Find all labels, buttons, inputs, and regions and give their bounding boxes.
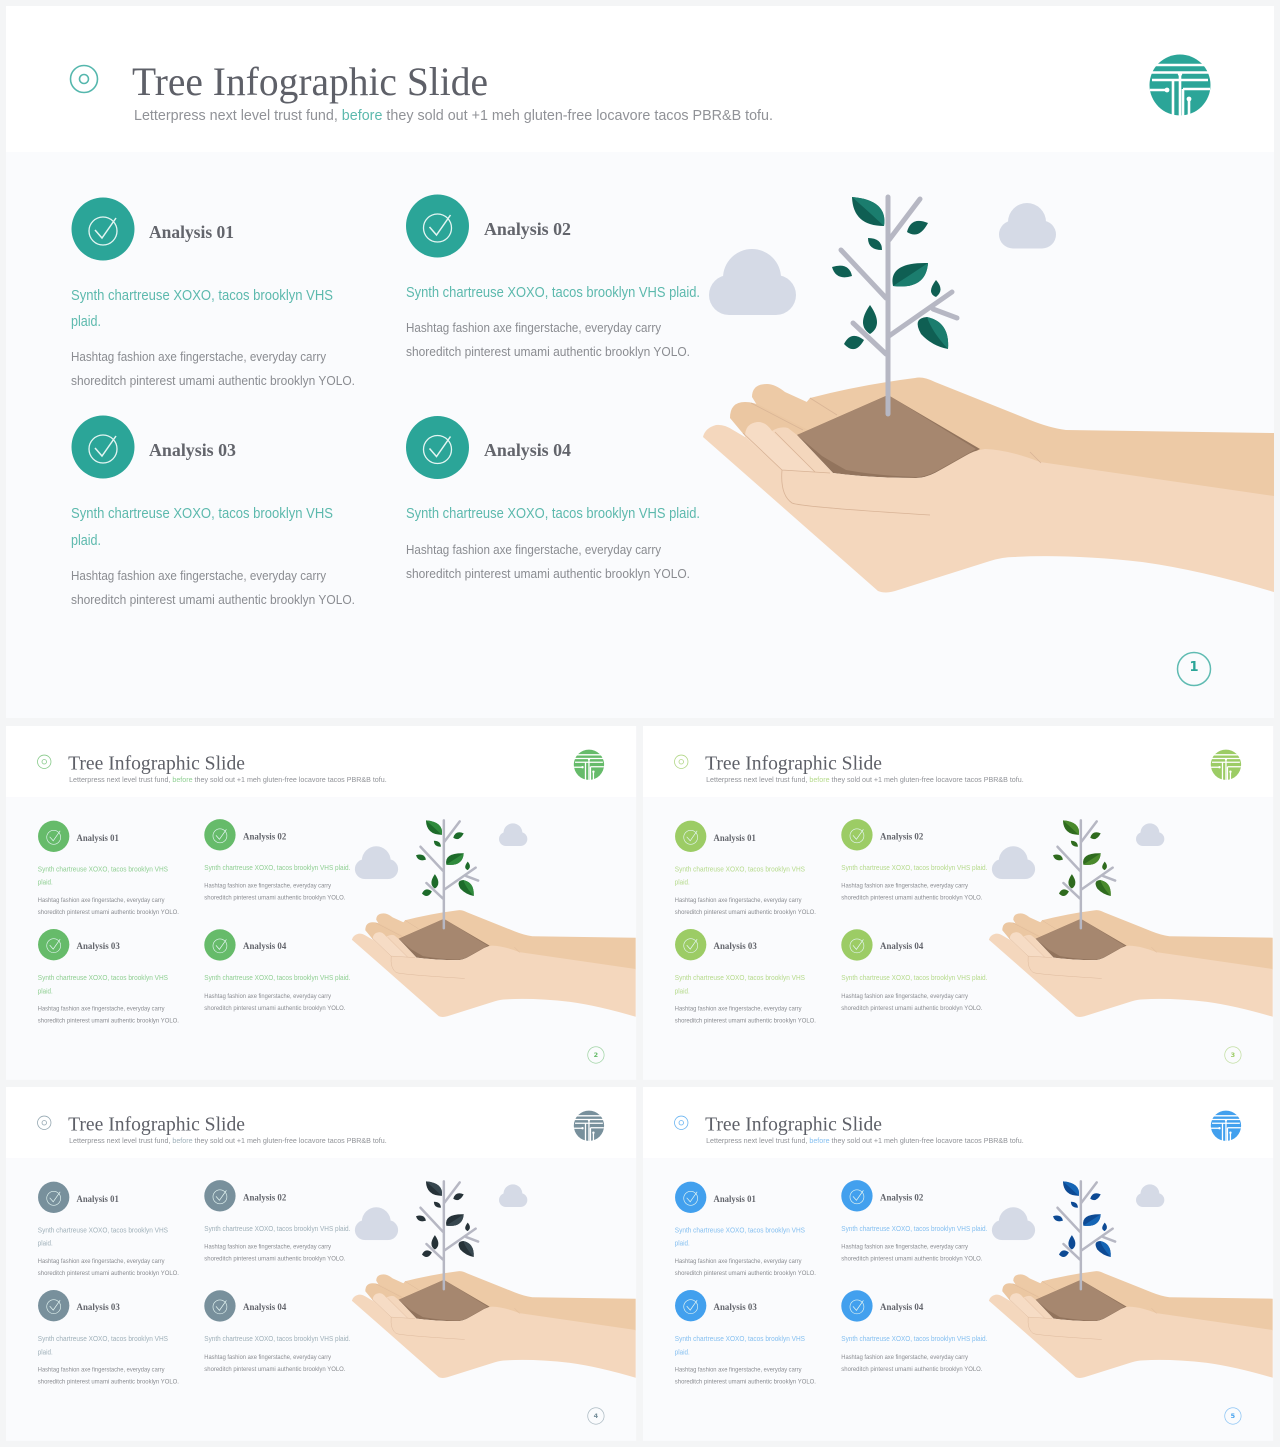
block: Analysis 03: plaid. [675,1347,690,1356]
icon: target [70,66,98,92]
page number [1225,1408,1241,1424]
cloud: large [709,249,796,315]
illustration: hands holding soil [703,378,1274,592]
block: Analysis 04 [841,929,987,1012]
block: Analysis 02: Analysis 02 [880,1192,924,1202]
title: Tree Infographic Slide [132,59,488,104]
block: Analysis 02: Hashtag fashion axe fingerstache, everyday carry [204,883,332,890]
block: Analysis 02: Analysis 02 [243,1192,287,1202]
block: Analysis 04: Synth chartreuse XOXO, tacos brooklyn VHS plaid. [841,1334,987,1343]
cloud: large [355,1207,398,1240]
page number: 2 [594,1051,598,1059]
block: Analysis 02 [841,1180,987,1262]
subtitle: Letterpress next level trust fund, before they sold out +1 meh gluten-free locavore tacos PBR&B tofu. [706,775,1024,784]
block: Analysis 01: Hashtag fashion axe fingerstache, everyday carry [675,1258,802,1265]
slide background [6,726,636,1080]
block: Analysis 03: Hashtag fashion axe fingerstache, everyday carry [675,1367,802,1374]
subtitle: Letterpress next level trust fund, before they sold out +1 meh gluten-free locavore tacos PBR&B tofu. [134,108,773,124]
block: Analysis 01: shoreditch pinterest umami authentic brooklyn YOLO. [71,374,355,388]
block: Analysis 01: Analysis 01 [77,1194,119,1204]
block: Analysis 03 [675,929,816,1025]
block: Analysis 03: Analysis 03 [714,941,757,951]
slide background [643,726,1273,1080]
block: Analysis 03 [71,416,355,607]
block: Analysis 02: shoreditch pinterest umami authentic brooklyn YOLO. [204,894,346,901]
title: Tree Infographic Slide [68,1114,245,1136]
block: Analysis 01: Synth chartreuse XOXO, tacos brooklyn VHS [675,865,805,874]
block: Analysis 02: Synth chartreuse XOXO, tacos brooklyn VHS plaid. [841,863,987,872]
icon: check [72,198,134,260]
block: Analysis 01: plaid. [675,1239,690,1248]
block: Analysis 03: shoreditch pinterest umami authentic brooklyn YOLO. [38,1018,179,1025]
block: Analysis 01: Hashtag fashion axe fingerstache, everyday carry [38,897,165,904]
body text: Hashtag fashion axe fingerstache, everyday carry [71,350,327,364]
block: Analysis 04: shoreditch pinterest umami authentic brooklyn YOLO. [841,1005,983,1012]
illustration: sapling [832,197,957,414]
panel: slide 2 (green) [6,726,636,1080]
block: Analysis 03: Synth chartreuse XOXO, tacos brooklyn VHS [675,973,805,982]
block: Analysis 04 [406,416,700,581]
cloud: large [992,1207,1035,1240]
page number: 1 [1189,660,1199,675]
block: Analysis 02: Synth chartreuse XOXO, tacos brooklyn VHS plaid. [204,863,350,872]
illustration: sapling [1053,1181,1115,1289]
block: Analysis 03: shoreditch pinterest umami authentic brooklyn YOLO. [38,1379,179,1386]
block: Analysis 03 [675,1290,816,1386]
accent text: Synth chartreuse XOXO, tacos brooklyn VHS [71,506,333,522]
illustration: hands holding soil [989,1271,1273,1378]
cloud: small [1136,823,1164,846]
block: Analysis 04: shoreditch pinterest umami authentic brooklyn YOLO. [204,1366,346,1373]
block: Analysis 01: Hashtag fashion axe fingerstache, everyday carry [38,1258,165,1265]
title: Tree Infographic Slide [705,1114,882,1136]
illustration: hands holding soil [989,910,1273,1017]
icon: target [38,755,51,768]
accent text: Synth chartreuse XOXO, tacos brooklyn VHS plaid. [406,285,700,301]
block: Analysis 04: Synth chartreuse XOXO, tacos brooklyn VHS plaid. [204,973,350,982]
block: Analysis 01: plaid. [71,314,101,330]
block: Analysis 01: Analysis 01 [714,1194,756,1204]
block: Analysis 02: shoreditch pinterest umami authentic brooklyn YOLO. [841,894,983,901]
block: Analysis 03: Synth chartreuse XOXO, tacos brooklyn VHS [38,1334,168,1343]
block: Analysis 03 [38,929,179,1025]
block: Analysis 01 [38,821,179,916]
block: Analysis 02: Analysis 02 [243,831,287,841]
block: Analysis 02: Analysis 02 [880,831,924,841]
panel: slide 5 (blue) [643,1087,1273,1441]
title: Tree Infographic Slide [705,753,882,775]
block: Analysis 01 [675,821,816,916]
block: Analysis 03: Synth chartreuse XOXO, tacos brooklyn VHS [38,973,168,982]
cloud: small [499,1184,527,1207]
heading: Analysis 04 [484,440,571,460]
heading: Analysis 01 [149,222,234,242]
panel: slide 3 (lime) [643,726,1273,1080]
accent text: Synth chartreuse XOXO, tacos brooklyn VHS [71,288,333,304]
page number [588,1408,604,1424]
block: Analysis 02: Synth chartreuse XOXO, tacos brooklyn VHS plaid. [204,1224,350,1233]
page number: 5 [1231,1412,1236,1420]
block: Analysis 01: shoreditch pinterest umami authentic brooklyn YOLO. [38,909,179,916]
body text: Hashtag fashion axe fingerstache, everyday carry [406,543,662,557]
block: Analysis 02 [841,819,987,901]
logo [1211,750,1241,780]
icon: target [38,1116,51,1129]
block: Analysis 02: Hashtag fashion axe fingerstache, everyday carry [841,883,969,890]
icon: check [72,416,134,478]
block: Analysis 01: plaid. [675,878,690,887]
block: Analysis 04: shoreditch pinterest umami authentic brooklyn YOLO. [406,567,690,581]
block: Analysis 02: shoreditch pinterest umami authentic brooklyn YOLO. [204,1255,346,1262]
block: Analysis 04: shoreditch pinterest umami authentic brooklyn YOLO. [204,1005,346,1012]
block: Analysis 03: Hashtag fashion axe fingerstache, everyday carry [675,1006,802,1013]
block: Analysis 02 [204,819,350,901]
illustration: sapling [416,820,478,928]
block: Analysis 01: shoreditch pinterest umami authentic brooklyn YOLO. [675,909,816,916]
block: Analysis 02: Synth chartreuse XOXO, tacos brooklyn VHS plaid. [841,1224,987,1233]
subtitle: Letterpress next level trust fund, before they sold out +1 meh gluten-free locavore tacos PBR&B tofu. [69,1136,387,1145]
block: Analysis 03: Synth chartreuse XOXO, tacos brooklyn VHS [675,1334,805,1343]
block: Analysis 04: Analysis 04 [243,941,287,951]
panel: main slide 1 (teal) [6,6,1274,718]
logo [1150,54,1210,116]
block: Analysis 03: Analysis 03 [77,941,120,951]
block: Analysis 02 [406,194,700,359]
block: Analysis 03: shoreditch pinterest umami authentic brooklyn YOLO. [71,593,355,607]
block: Analysis 01 [675,1182,816,1277]
block: Analysis 02: shoreditch pinterest umami authentic brooklyn YOLO. [841,1255,983,1262]
logo [1211,1111,1241,1141]
block: Analysis 04: Hashtag fashion axe fingerstache, everyday carry [204,1354,332,1361]
block: Analysis 04: Hashtag fashion axe fingerstache, everyday carry [841,1354,969,1361]
panel: slide 4 (slate) [6,1087,636,1441]
block: Analysis 01: Hashtag fashion axe fingerstache, everyday carry [675,897,802,904]
block: Analysis 03: Analysis 03 [77,1302,120,1312]
block: Analysis 01: plaid. [38,1239,53,1248]
block: Analysis 04: Hashtag fashion axe fingerstache, everyday carry [841,993,969,1000]
block: Analysis 03: Hashtag fashion axe fingerstache, everyday carry [38,1006,165,1013]
slide background [6,1087,636,1441]
slide background [6,6,1274,718]
block: Analysis 01: Synth chartreuse XOXO, tacos brooklyn VHS [675,1226,805,1235]
block: Analysis 01 [38,1182,179,1277]
block: Analysis 01: plaid. [38,878,53,887]
illustration: hands holding soil [352,1271,636,1378]
block: Analysis 03: shoreditch pinterest umami authentic brooklyn YOLO. [675,1379,816,1386]
cloud: small [499,823,527,846]
block: Analysis 03: Analysis 03 [714,1302,757,1312]
block: Analysis 01: Synth chartreuse XOXO, tacos brooklyn VHS [38,865,168,874]
illustration: hands holding soil [352,910,636,1017]
page number [1225,1047,1241,1063]
title: Tree Infographic Slide [68,753,245,775]
cloud: large [992,846,1035,879]
page number [1178,652,1210,686]
block: Analysis 03: plaid. [38,986,53,995]
block: Analysis 03: plaid. [38,1347,53,1356]
illustration: sapling [416,1181,478,1289]
accent text: Synth chartreuse XOXO, tacos brooklyn VHS plaid. [406,506,700,522]
icon: check [406,416,469,479]
block: Analysis 01: Analysis 01 [77,833,119,843]
heading: Analysis 03 [149,440,236,460]
block: Analysis 01: Analysis 01 [714,833,756,843]
block: Analysis 02: shoreditch pinterest umami authentic brooklyn YOLO. [406,345,690,359]
icon: target [675,1116,688,1129]
page number: 4 [594,1412,599,1420]
block: Analysis 02 [204,1180,350,1262]
block: Analysis 03 [38,1290,179,1386]
icon: check [406,194,469,258]
illustration: sapling [1053,820,1115,928]
icon: target [675,755,688,768]
cloud: small [1136,1184,1164,1207]
block: Analysis 04 [204,1290,350,1373]
page number [588,1047,604,1063]
heading: Analysis 02 [484,219,571,239]
block: Analysis 04 [204,929,350,1012]
block: Analysis 01: shoreditch pinterest umami authentic brooklyn YOLO. [38,1270,179,1277]
block: Analysis 01: shoreditch pinterest umami authentic brooklyn YOLO. [675,1270,816,1277]
page number: 3 [1231,1051,1235,1059]
block: Analysis 04: Hashtag fashion axe fingerstache, everyday carry [204,993,332,1000]
cloud: small [999,203,1056,248]
block: Analysis 03: plaid. [71,533,101,549]
logo [574,1111,604,1141]
block: Analysis 01 [71,198,355,388]
slide background [643,1087,1273,1441]
subtitle: Letterpress next level trust fund, before they sold out +1 meh gluten-free locavore tacos PBR&B tofu. [69,775,387,784]
block: Analysis 04: Synth chartreuse XOXO, tacos brooklyn VHS plaid. [204,1334,350,1343]
block: Analysis 03: Hashtag fashion axe fingerstache, everyday carry [38,1367,165,1374]
block: Analysis 03: shoreditch pinterest umami authentic brooklyn YOLO. [675,1018,816,1025]
cloud: large [355,846,398,879]
block: Analysis 02: Hashtag fashion axe fingerstache, everyday carry [841,1244,969,1251]
logo [574,750,604,780]
body text: Hashtag fashion axe fingerstache, everyday carry [406,321,662,335]
block: Analysis 04: shoreditch pinterest umami authentic brooklyn YOLO. [841,1366,983,1373]
block: Analysis 02: Hashtag fashion axe fingerstache, everyday carry [204,1244,332,1251]
body text: Hashtag fashion axe fingerstache, everyday carry [71,569,327,583]
block: Analysis 04: Analysis 04 [880,941,924,951]
block: Analysis 04: Analysis 04 [880,1302,924,1312]
block: Analysis 01: Synth chartreuse XOXO, tacos brooklyn VHS [38,1226,168,1235]
subtitle: Letterpress next level trust fund, before they sold out +1 meh gluten-free locavore tacos PBR&B tofu. [706,1136,1024,1145]
block: Analysis 04: Synth chartreuse XOXO, tacos brooklyn VHS plaid. [841,973,987,982]
block: Analysis 04 [841,1290,987,1373]
block: Analysis 03: plaid. [675,986,690,995]
block: Analysis 04: Analysis 04 [243,1302,287,1312]
